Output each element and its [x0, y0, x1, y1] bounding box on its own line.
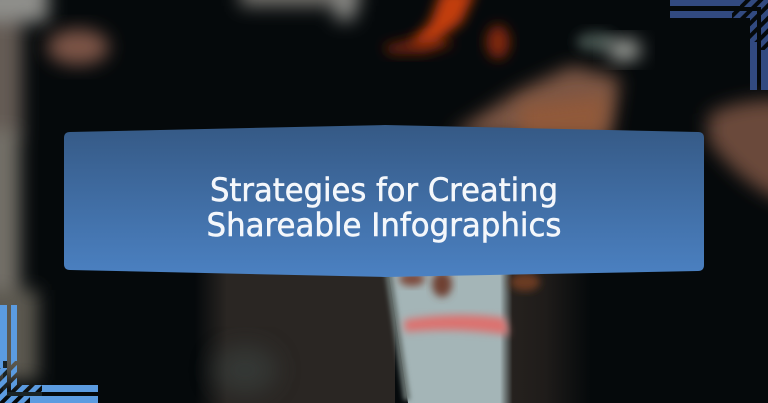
blurred orange shape, top centre: [383, 0, 510, 59]
blurred hand, right: [708, 100, 768, 205]
title: [206, 171, 562, 244]
icon: corner bracket, bottom left: [0, 305, 98, 403]
blurred arm: [450, 66, 620, 140]
blurred watch: [576, 32, 641, 61]
title: Shareable Infographics: [206, 206, 562, 244]
icon: corner bracket, top right: [670, 0, 768, 90]
blurred cup with red band: [388, 265, 590, 403]
title banner: [64, 125, 704, 277]
blurred dark floor left of cup: [195, 265, 395, 403]
blurred teal patch: [213, 346, 277, 394]
blurred skin patch, upper left: [47, 29, 109, 65]
title: Strategies for Creating: [210, 171, 558, 209]
